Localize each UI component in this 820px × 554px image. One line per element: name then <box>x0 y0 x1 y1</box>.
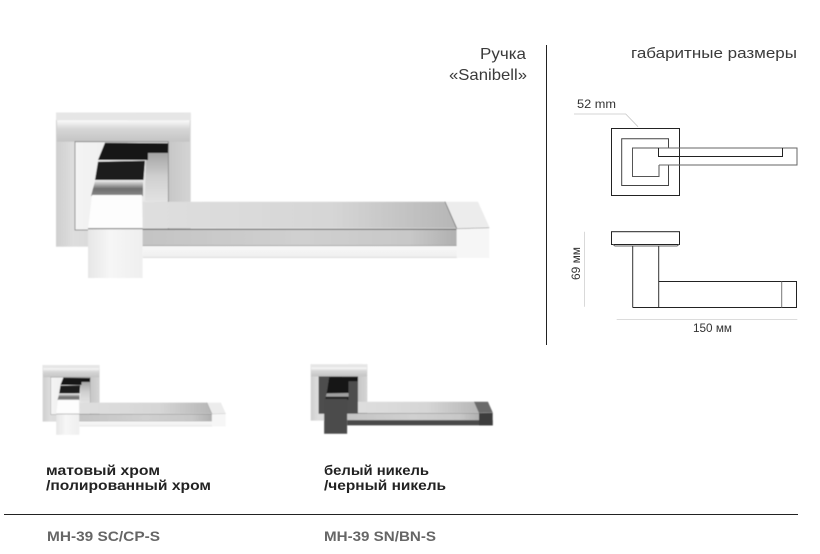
finish label: white / black nickel: белый никель <box>324 462 429 478</box>
lever tip divider <box>781 282 783 308</box>
dark neck <box>327 377 358 393</box>
height dimension line <box>584 232 586 307</box>
lever underside <box>347 420 493 425</box>
heading: product name: Ручка <box>480 46 526 63</box>
finish label: matte / polished chrome <box>46 462 211 493</box>
neck shadow <box>325 397 349 400</box>
heading: product name <box>449 46 527 84</box>
variant photo: white nickel / black nickel <box>311 364 493 434</box>
lever inner outline <box>658 148 782 156</box>
plate base <box>613 244 679 246</box>
vertical divider <box>546 45 548 345</box>
lever tip top <box>474 402 493 413</box>
inner square outline <box>632 148 659 176</box>
neck outline <box>633 246 659 308</box>
heading: overall dimensions: габаритные размеры <box>631 45 797 62</box>
finish label: white / black nickel <box>324 462 446 493</box>
plate outline <box>612 232 680 244</box>
finish label: matte / polished chrome: /полированный хром <box>46 477 211 493</box>
product code: SN/BN-S: MH-39 SN/BN-S <box>324 528 436 544</box>
finish label: matte / polished chrome: матовый хром <box>46 462 160 478</box>
dark inner plate <box>319 377 358 414</box>
middle square outline <box>622 139 668 186</box>
lever outline <box>633 282 796 308</box>
heading: product name: «Sanibell» <box>449 67 527 84</box>
neck highlight <box>326 393 349 397</box>
width dimension line <box>617 318 797 320</box>
main product photo: handle <box>56 113 489 278</box>
product code: SC/CP-S: MH-39 SC/CP-S <box>47 528 160 544</box>
label: 69 mm: 69 мм <box>571 247 583 280</box>
label: 52 mm: 52 mm <box>577 99 616 111</box>
lever tip front <box>479 413 493 425</box>
variant photo: matte chrome / polished chrome <box>43 365 226 435</box>
diagram: top view with 52 mm dimension <box>574 114 797 196</box>
finish label: white / black nickel: /черный никель <box>324 477 446 493</box>
rose outline <box>612 128 680 196</box>
dark elbow <box>324 399 347 434</box>
label: 150 mm: 150 мм <box>693 323 732 335</box>
diagram: side view with dimensions <box>584 232 797 320</box>
horizontal divider <box>4 514 798 516</box>
lever outline <box>658 148 797 165</box>
dimension leader <box>574 114 638 127</box>
